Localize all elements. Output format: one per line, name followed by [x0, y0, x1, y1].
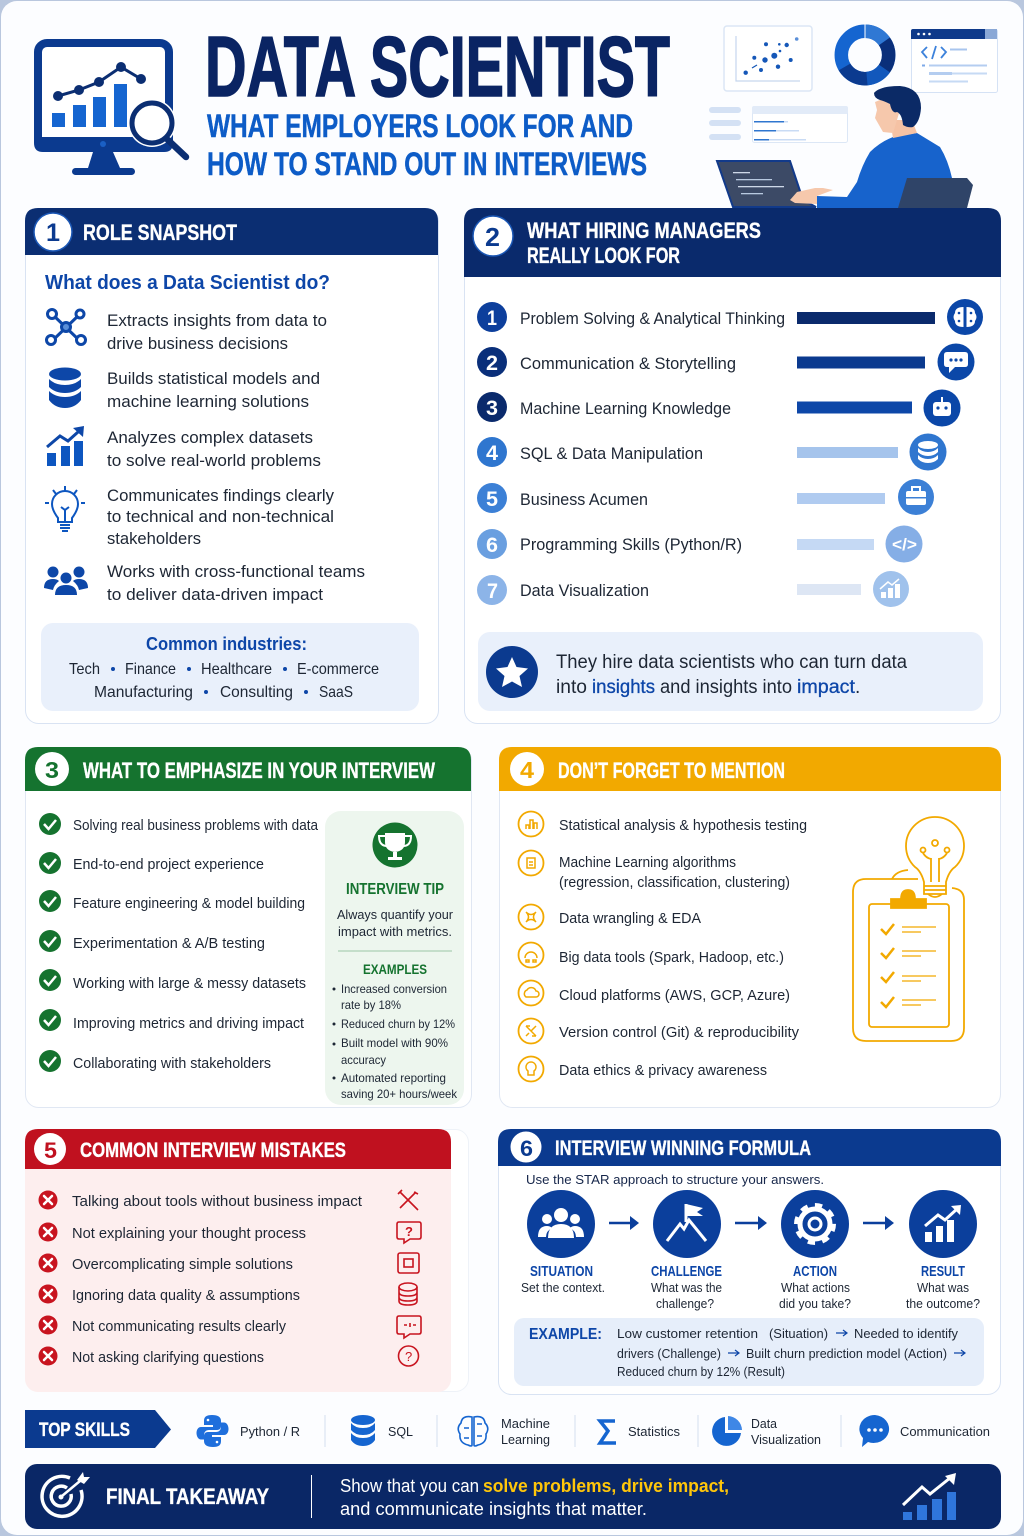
top skills strip — [196, 1415, 990, 1447]
step: situation: SITUATION — [530, 1263, 593, 1280]
panel header: emphasize: 3 — [45, 757, 59, 783]
illustration: person at laptop — [717, 86, 973, 208]
row 2: communication — [477, 344, 974, 380]
skill: machine learning: Machine — [501, 1416, 550, 1431]
callout: example: Reduced churn by 12% (Result) — [617, 1364, 785, 1379]
icon: growth chart — [47, 426, 84, 466]
panel header: emphasize — [25, 747, 471, 791]
item text: teams: Works with cross-functional teams — [107, 562, 365, 581]
icon: rising chart — [903, 1473, 956, 1520]
skill: communication — [859, 1415, 990, 1447]
mention list: Data ethics & privacy awareness — [559, 1062, 767, 1079]
callout: interview tip: impact with metrics. — [338, 924, 452, 939]
header icon: monitor with chart and magnifier — [34, 43, 186, 175]
skill: statistics — [600, 1421, 680, 1443]
skill: data visualization: Visualization — [751, 1432, 821, 1447]
skill: sql: SQL — [388, 1424, 413, 1439]
arrow — [863, 1216, 894, 1230]
skill: python — [196, 1415, 300, 1447]
panel: common interview mistakes — [25, 1129, 468, 1392]
mention list: Statistical analysis & hypothesis testing — [559, 817, 807, 834]
mistakes list: Not explaining your thought process — [72, 1225, 306, 1242]
row 1: problem solving: 1 — [487, 307, 497, 330]
illustration: clipboard and lightbulb — [853, 817, 964, 1041]
icons: mistake symbols: ? — [405, 1224, 413, 1239]
skill: statistics: Statistics — [628, 1424, 680, 1439]
step: situation: Set the context. — [521, 1280, 605, 1295]
callout: interview tip: accuracy — [341, 1053, 386, 1067]
panel header: formula: INTERVIEW WINNING FORMULA — [555, 1137, 811, 1160]
panel: don't forget to mention — [499, 747, 1001, 1108]
checklist: End-to-end project experience — [73, 856, 264, 873]
callout: interview tip: Built model with 90% — [341, 1036, 448, 1050]
icons: mistake symbols — [397, 1190, 421, 1366]
icon: team — [44, 566, 88, 595]
callout: interview tip: Reduced churn by 12% — [341, 1017, 455, 1031]
panel header: mention — [499, 747, 1001, 791]
row 7: data visualization — [477, 571, 909, 607]
callout: interview tip: Automated reporting — [341, 1071, 446, 1085]
step: action: What actions — [781, 1280, 850, 1295]
item text: communicates: Communicates findings clearly — [107, 486, 334, 505]
row 6: programming: </> — [892, 535, 917, 554]
step: action: ACTION — [793, 1263, 837, 1280]
checklist — [39, 813, 319, 1072]
final takeaway banner: and communicate insights that matter. — [340, 1499, 647, 1519]
step: situation — [521, 1190, 605, 1295]
illustration: code window — [911, 29, 998, 92]
step: result: the outcome? — [906, 1296, 980, 1311]
callout: common industries: Common industries: — [146, 634, 307, 654]
top skills label — [25, 1410, 171, 1448]
callout: example: drivers (Challenge) — [617, 1346, 721, 1361]
arrow — [609, 1216, 639, 1230]
mistakes list — [38, 1190, 363, 1366]
mistakes list: Not communicating results clearly — [72, 1318, 286, 1335]
callout: example: Needed to identify — [854, 1326, 958, 1341]
panel header: hiring managers: REALLY LOOK FOR — [527, 243, 680, 268]
mention list: (regression, classification, clustering) — [559, 874, 790, 891]
title: DATA SCIENTIST — [205, 20, 670, 115]
item text: insights: drive business decisions — [107, 334, 288, 353]
icon: star — [486, 646, 538, 698]
mistakes list: Talking about tools without business impact — [72, 1193, 363, 1210]
panel header: mention: 4 — [520, 757, 534, 783]
panel: what to emphasize — [25, 747, 472, 1108]
checklist: Collaborating with stakeholders — [73, 1055, 271, 1072]
callout: they hire data scientists: into — [556, 677, 587, 698]
row 4: sql: 4 — [486, 442, 498, 465]
callout: interview tip: saving 20+ hours/week — [341, 1087, 458, 1101]
panel: role snapshot — [25, 208, 438, 724]
callout: common industries: Healthcare — [201, 661, 272, 678]
icons: mistake symbols: ? — [405, 1349, 412, 1364]
subtitle: HOW TO STAND OUT IN INTERVIEWS — [207, 146, 647, 182]
step: challenge — [651, 1190, 722, 1311]
callout: interview tip: Always quantify your — [337, 907, 454, 922]
mention list — [518, 812, 807, 1082]
callout: they hire data scientists: insights — [592, 677, 655, 698]
mistakes list: Not asking clarifying questions — [72, 1349, 264, 1366]
checklist: Solving real business problems with data — [73, 817, 319, 834]
panel header: formula — [498, 1129, 1001, 1166]
mistakes list: Ignoring data quality & assumptions — [72, 1287, 300, 1304]
item text: datasets: Analyzes complex datasets — [107, 428, 313, 447]
panel header: mistakes: 5 — [44, 1138, 57, 1163]
item text: teams: to deliver data-driven impact — [107, 585, 323, 604]
callout: example: EXAMPLE: — [529, 1326, 602, 1343]
callout: they hire data scientists: and insights into — [660, 677, 792, 698]
mention list: Machine Learning algorithms — [559, 854, 736, 871]
row 5: business acumen: Business Acumen — [520, 490, 648, 509]
step: result — [906, 1190, 980, 1311]
checklist: Improving metrics and driving impact — [73, 1015, 305, 1032]
callout: common industries: Consulting — [220, 684, 293, 701]
icon: trophy — [372, 822, 418, 868]
step: challenge: CHALLENGE — [651, 1263, 722, 1280]
row 2: communication: Communication & Storytelling — [520, 354, 736, 373]
panel: interview winning formula — [498, 1129, 1001, 1394]
item text: models: Builds statistical models and — [107, 369, 320, 388]
callout: interview tip: EXAMPLES — [363, 961, 427, 977]
subtitle: WHAT EMPLOYERS LOOK FOR AND — [207, 108, 633, 144]
item text: insights: Extracts insights from data to — [107, 311, 327, 330]
callout: example: Low customer retention — [617, 1326, 758, 1341]
callout: interview tip: Increased conversion — [341, 982, 447, 996]
row 5: business acumen — [477, 479, 934, 515]
panel header: emphasize: WHAT TO EMPHASIZE IN YOUR INTERVIEW — [83, 758, 435, 783]
callout: common industries: Manufacturing — [94, 684, 193, 701]
icon: database — [49, 368, 81, 408]
row 4: sql — [477, 434, 946, 470]
icon: lightbulb — [45, 486, 85, 531]
subtitle — [207, 108, 647, 182]
skill: data visualization — [712, 1416, 821, 1447]
callout: they hire data scientists — [478, 632, 983, 711]
panel header: role snapshot: 1 — [46, 219, 60, 247]
mention list: Cloud platforms (AWS, GCP, Azure) — [559, 987, 790, 1004]
callout: example: (Situation) — [769, 1326, 828, 1341]
item text: communicates: stakeholders — [107, 529, 201, 548]
callout: interview tip: INTERVIEW TIP — [346, 881, 444, 898]
row 7: data visualization: 7 — [487, 580, 498, 603]
callout: they hire data scientists: . — [855, 677, 860, 698]
row 6: programming: 6 — [486, 534, 498, 557]
row 4: sql: SQL & Data Manipulation — [520, 444, 703, 463]
panel header: hiring managers — [464, 208, 1001, 277]
item text: models: machine learning solutions — [107, 392, 309, 411]
row 5: business acumen: 5 — [486, 488, 498, 511]
row 6: programming: Programming Skills (Python/R) — [520, 535, 742, 554]
row 3: machine learning: Machine Learning Knowledge — [520, 399, 731, 418]
skill: machine learning: Learning — [501, 1432, 550, 1447]
item text: teams — [107, 562, 365, 604]
callout: common industries — [41, 623, 419, 711]
checklist: Working with large & messy datasets — [73, 975, 306, 992]
skill: data visualization: Data — [751, 1416, 778, 1431]
icon: network — [46, 310, 86, 344]
step: challenge: What was the — [651, 1280, 722, 1295]
callout: common industries: Finance — [125, 661, 176, 678]
row 7: data visualization: Data Visualization — [520, 581, 649, 600]
final takeaway banner: Show that you can — [340, 1476, 479, 1496]
row 2: communication: 2 — [486, 352, 498, 375]
skill: communication: Communication — [900, 1424, 990, 1439]
item text: communicates — [107, 486, 334, 548]
checklist: Feature engineering & model building — [73, 895, 305, 912]
callout: they hire data scientists: impact — [797, 677, 856, 698]
row 3: machine learning — [477, 390, 960, 426]
intro line: Use the STAR approach to structure your answers. — [526, 1172, 824, 1187]
item text: datasets — [107, 428, 321, 470]
panel header: role snapshot — [25, 208, 438, 255]
mention list: Data wrangling & EDA — [559, 910, 701, 927]
item text: datasets: to solve real-world problems — [107, 451, 321, 470]
skill: machine learning — [458, 1416, 550, 1447]
arrow — [735, 1216, 767, 1230]
item text: insights — [107, 311, 327, 353]
callout: they hire data scientists: They hire data scientists who can turn data — [556, 652, 907, 673]
panel header: formula: 6 — [520, 1136, 533, 1161]
illustration: donut chart — [841, 24, 889, 79]
step: result: RESULT — [921, 1263, 965, 1280]
mention list: Version control (Git) & reproducibility — [559, 1024, 799, 1041]
step: challenge: challenge? — [656, 1296, 714, 1311]
final takeaway banner: FINAL TAKEAWAY — [106, 1484, 269, 1509]
skill: python: Python / R — [240, 1424, 300, 1439]
item text: models — [107, 369, 320, 411]
panel header: hiring managers: 2 — [485, 222, 500, 252]
mistakes list: Overcomplicating simple solutions — [72, 1256, 293, 1273]
callout: interview tip — [325, 811, 464, 1105]
callout: interview tip: rate by 18% — [341, 998, 401, 1012]
top skills label: TOP SKILLS — [39, 1420, 130, 1441]
callout: example: Built churn prediction model (Action) — [746, 1346, 947, 1361]
item text: communicates: to technical and non-technical — [107, 507, 334, 526]
row 3: machine learning: 3 — [486, 397, 498, 420]
subheading: What does a Data Scientist do? — [45, 272, 330, 294]
callout: common industries: Tech — [69, 661, 100, 678]
mention list: Big data tools (Spark, Hadoop, etc.) — [559, 949, 784, 966]
checklist: Experimentation & A/B testing — [73, 935, 265, 952]
callout: common industries: E-commerce — [297, 661, 379, 678]
panel header: role snapshot: ROLE SNAPSHOT — [83, 220, 237, 245]
panel header: hiring managers: WHAT HIRING MANAGERS — [527, 218, 761, 243]
row 1: problem solving: Problem Solving & Analytical Thinking — [520, 309, 785, 328]
step: action: did you take? — [779, 1296, 851, 1311]
callout: example — [514, 1318, 984, 1386]
illustration: scatter chart card — [724, 26, 812, 91]
row 1: problem solving — [477, 299, 983, 335]
panel header: mistakes — [25, 1129, 451, 1169]
step: action — [779, 1190, 851, 1311]
panel header: mention: DON’T FORGET TO MENTION — [558, 758, 785, 783]
step: result: What was — [917, 1280, 969, 1295]
icon: target — [42, 1472, 90, 1516]
skill: sql — [351, 1415, 413, 1446]
final takeaway banner — [25, 1464, 1001, 1529]
panel: what hiring managers look for — [464, 208, 1001, 724]
panel header: mistakes: COMMON INTERVIEW MISTAKES — [80, 1139, 346, 1162]
final takeaway banner: solve problems, drive impact, — [483, 1476, 729, 1496]
callout: common industries: SaaS — [319, 684, 353, 701]
row 6: programming — [477, 526, 922, 562]
illustration: dashboard rows — [709, 106, 848, 142]
